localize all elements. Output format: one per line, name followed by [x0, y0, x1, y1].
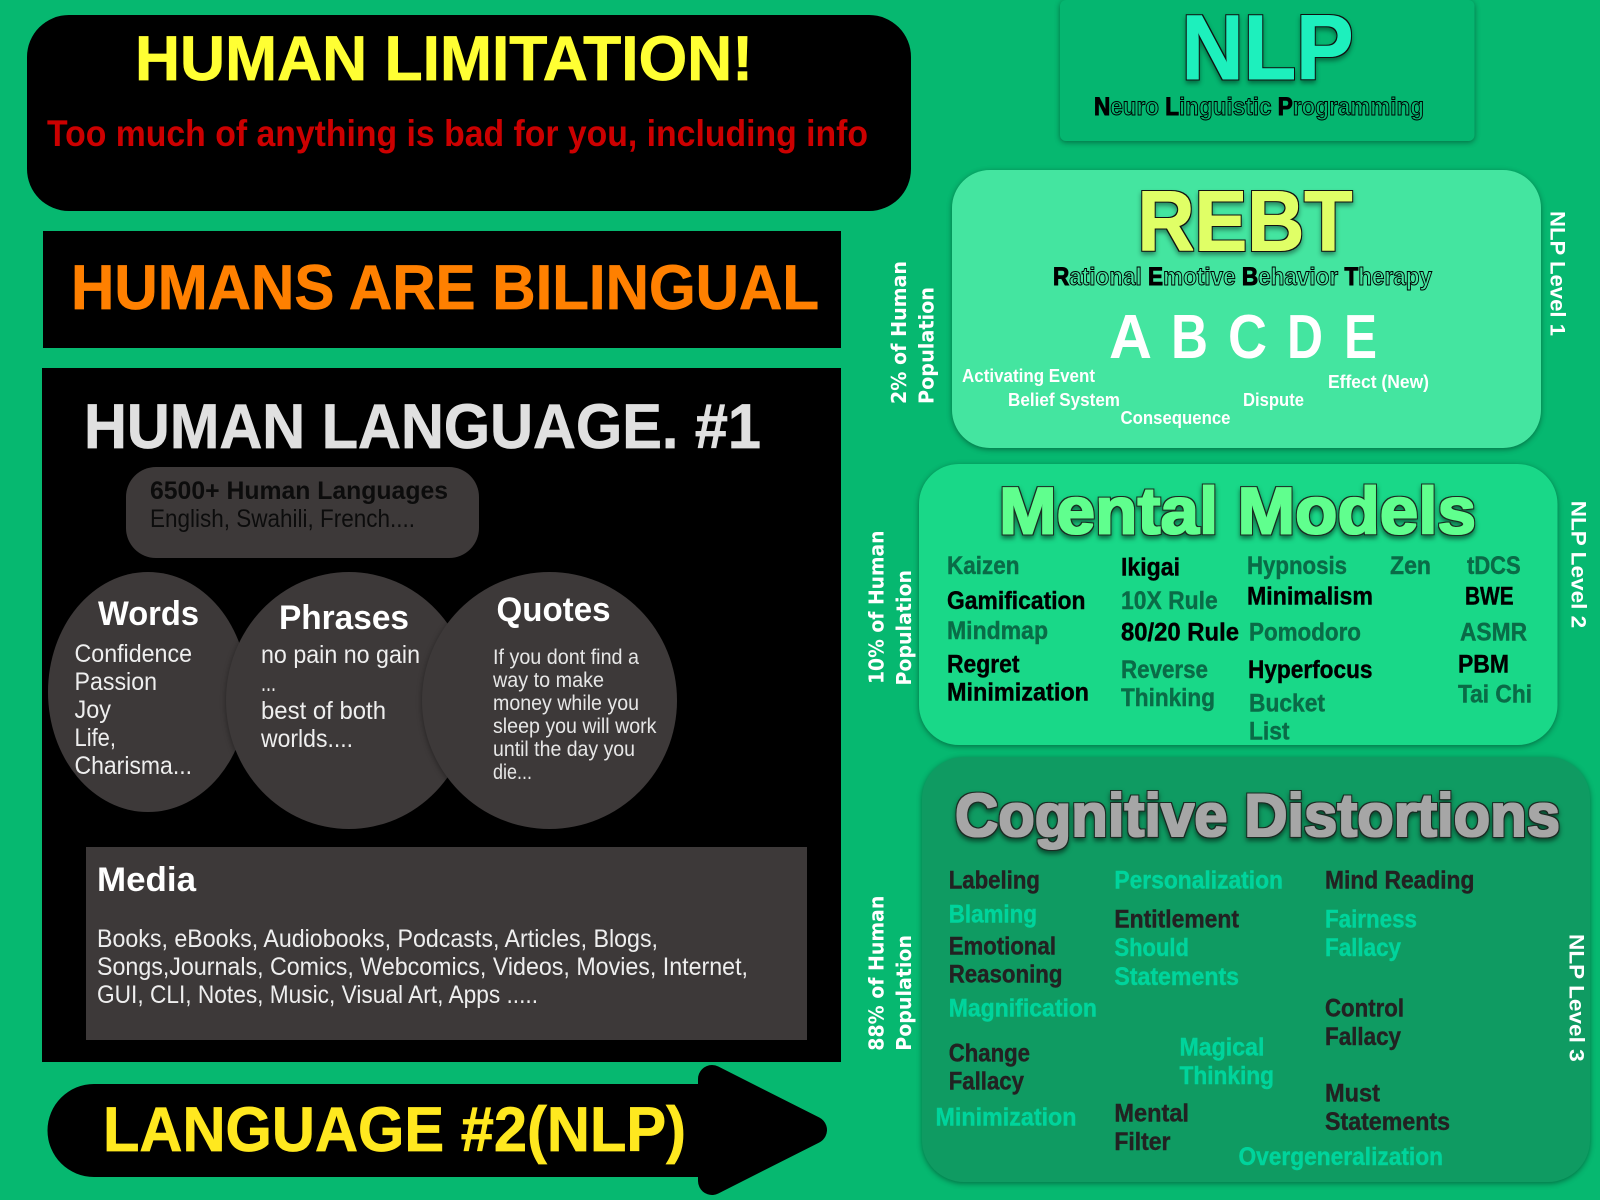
cognitive distortion items: Statements: [1325, 1108, 1450, 1136]
cognitive distortion items: Fallacy: [1325, 1023, 1401, 1051]
cognitive distortion items: Emotional: [949, 932, 1056, 960]
bubble: words: [48, 572, 248, 812]
panel: humans are bilingual: [43, 231, 841, 348]
mental model items: Pomodoro: [1249, 619, 1361, 647]
media list: Books, eBooks, Audiobooks, Podcasts, Articles, Blogs,: [97, 925, 658, 953]
cognitive distortion items: Fallacy: [1325, 934, 1401, 962]
subtitle: rational emotive behavior therapy: Rational Emotive Behavior Therapy: [1053, 263, 1432, 291]
cognitive distortion items: Overgeneralization: [1238, 1143, 1443, 1171]
side label: 88% of human population: [865, 896, 916, 1051]
mental model items: Regret: [947, 651, 1020, 679]
cognitive distortion items: Magnification: [949, 995, 1097, 1023]
cognitive distortion items: [936, 867, 1474, 1171]
panel: mental models: [919, 464, 1558, 745]
panel: human limitation: [27, 15, 911, 211]
cognitive distortion items: Control: [1325, 995, 1404, 1023]
label: consequence: Consequence: [1120, 408, 1230, 428]
cognitive distortion items: Change: [949, 1040, 1030, 1068]
mental model items: PBM: [1458, 651, 1509, 679]
bubble: phrases: [226, 572, 472, 829]
cognitive distortion items: Personalization: [1114, 867, 1283, 895]
mental model items: [947, 552, 1532, 745]
letters: A B C D E: [1109, 303, 1377, 372]
side label: NLP level 1: NLP Level 1: [1546, 211, 1568, 336]
mental model items: Thinking: [1121, 684, 1215, 712]
mental model items: Gamification: [947, 587, 1086, 615]
mental model items: Reverse: [1121, 656, 1208, 684]
bubble: quotes: [422, 572, 677, 829]
cognitive distortion items: Fallacy: [949, 1067, 1024, 1095]
mental model items: 10X Rule: [1121, 587, 1218, 615]
cognitive distortion items: Entitlement: [1114, 906, 1240, 934]
mental model items: Bucket: [1249, 690, 1326, 718]
cognitive distortion items: Minimization: [936, 1104, 1076, 1132]
quote text: until the day you: [493, 738, 635, 761]
letters: A B C D E: A: [1109, 303, 1152, 372]
cognitive distortion items: Must: [1325, 1080, 1381, 1108]
label: belief system: Belief System: [1008, 390, 1120, 410]
text: too much info warning: Too much of anything is bad for you, including info: [47, 113, 868, 154]
panel: human language #1: [42, 368, 841, 1062]
letters: A B C D E: B: [1171, 303, 1208, 372]
letters: A B C D E: D: [1287, 303, 1323, 372]
cognitive distortion items: Should: [1114, 934, 1189, 962]
cognitive distortion items: Mind Reading: [1325, 867, 1474, 895]
mental model items: Hyperfocus: [1248, 656, 1372, 684]
heading: NLP: NLP: [1182, 0, 1354, 99]
mental model items: 80/20 Rule: [1121, 619, 1239, 647]
panel: NLP: [1060, 0, 1474, 141]
words list: Charisma...: [74, 752, 192, 780]
cognitive distortion items: Reasoning: [949, 961, 1062, 989]
card: media: [86, 847, 807, 1040]
phrases list: best of both: [261, 697, 386, 725]
letters: A B C D E: E: [1344, 303, 1377, 372]
cognitive distortion items: Blaming: [949, 901, 1037, 929]
label: dispute: Dispute: [1243, 390, 1304, 410]
cognitive distortion items: Magical: [1180, 1034, 1264, 1062]
words list: Joy: [74, 696, 111, 724]
side label: 2% of human population: [887, 261, 938, 404]
cognitive distortion items: Filter: [1114, 1128, 1171, 1156]
side label: NLP level 3: NLP Level 3: [1564, 934, 1587, 1062]
cognitive distortion items: Mental: [1114, 1100, 1189, 1128]
quote text: die...: [493, 761, 532, 784]
mental model items: Minimization: [947, 679, 1089, 707]
side label: 10% of human population: 10% of Human: [865, 530, 889, 684]
heading: humans are bilingual: HUMANS ARE BILINGUAL: [71, 253, 819, 323]
letters: A B C D E: C: [1228, 303, 1267, 372]
side label: 2% of human population: 2% of Human: [887, 261, 911, 404]
media list: GUI, CLI, Notes, Music, Visual Art, Apps .....: [97, 981, 538, 1009]
mental model items: tDCS: [1467, 552, 1521, 580]
heading: cognitive distortions: Cognitive Distortions: [955, 782, 1560, 849]
heading: human language #1: HUMAN LANGUAGE. #1: [84, 392, 761, 462]
media list: [97, 925, 748, 1009]
phrases list: worlds....: [260, 725, 353, 753]
card text: English, Swahili, French....: [150, 505, 415, 533]
media list: Songs,Journals, Comics, Webcomics, Videos, Movies, Internet,: [97, 953, 748, 981]
label: activating event: Activating Event: [962, 366, 1095, 386]
quotes heading: Quotes: [496, 591, 610, 629]
heading: mental models: Mental Models: [999, 474, 1476, 548]
mental model items: Tai Chi: [1458, 681, 1532, 709]
quote text: [492, 646, 657, 784]
words list: Passion: [74, 668, 157, 696]
words heading: Words: [98, 595, 199, 633]
quote text: money while you: [493, 692, 639, 715]
words list: Life,: [74, 724, 116, 752]
panel: REBT: [952, 170, 1541, 448]
mental model items: Kaizen: [947, 552, 1020, 580]
mental model items: BWE: [1465, 583, 1514, 611]
mental model items: Minimalism: [1247, 583, 1373, 611]
mental model items: Hypnosis: [1247, 552, 1347, 580]
heading: human limitation: HUMAN LIMITATION!: [135, 24, 753, 94]
side label: 88% of human population: 88% of Human: [865, 896, 889, 1051]
mental model items: Mindmap: [947, 617, 1048, 645]
quote text: way to make: [492, 669, 604, 692]
phrases list: ...: [261, 669, 276, 697]
card heading: 6500+ Human Languages: [150, 477, 448, 505]
card: human languages: [126, 467, 479, 558]
arrow label: LANGUAGE #2(NLP): [103, 1095, 686, 1165]
heading: REBT: REBT: [1138, 174, 1353, 270]
side label: NLP level 2: NLP Level 2: [1567, 501, 1590, 628]
mental model items: Zen: [1390, 552, 1431, 580]
subtitle: neuro linguistic programming: Neuro Linguistic Programming: [1094, 93, 1424, 121]
mental model items: Ikigai: [1121, 554, 1180, 582]
words list: [74, 640, 192, 780]
label: effect (new): Effect (New): [1328, 372, 1429, 392]
media heading: Media: [97, 861, 197, 899]
side label: 2% of human population: Population: [914, 287, 938, 404]
side label: 88% of human population: Population: [892, 935, 916, 1051]
phrases list: [260, 641, 420, 753]
cognitive distortion items: Labeling: [949, 867, 1040, 895]
cognitive distortion items: Fairness: [1325, 906, 1417, 934]
quote text: sleep you will work: [493, 715, 657, 738]
phrases list: no pain no gain: [261, 641, 420, 669]
panel: cognitive distortions: [922, 757, 1590, 1182]
side label: 10% of human population: [865, 530, 916, 686]
side label: 10% of human population: Population: [892, 570, 916, 686]
phrases heading: Phrases: [279, 599, 409, 637]
mental model items: List: [1249, 717, 1290, 745]
mental model items: ASMR: [1460, 619, 1527, 647]
cognitive distortion items: Statements: [1114, 963, 1239, 991]
arrow: language #2: [48, 1079, 813, 1181]
cognitive distortion items: Thinking: [1180, 1062, 1274, 1090]
words list: Confidence: [74, 640, 192, 668]
quote text: If you dont find a: [493, 646, 639, 669]
